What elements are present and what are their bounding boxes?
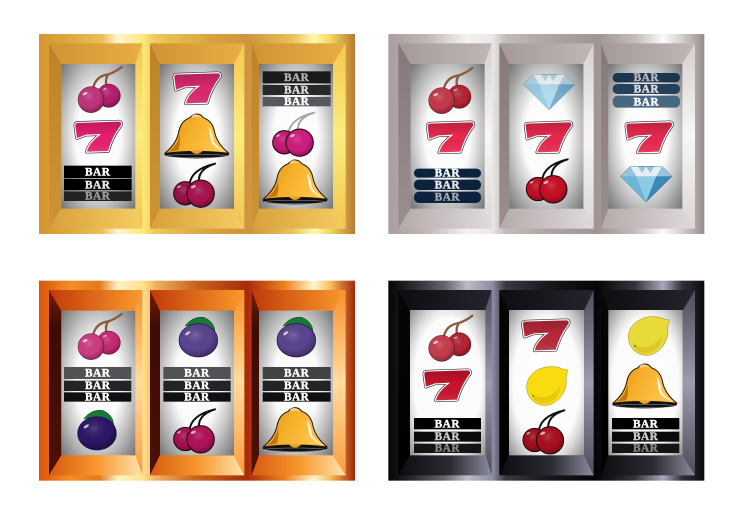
reel frame 1 xyxy=(49,290,142,475)
icon: bell xyxy=(164,114,229,158)
reel frame 3 xyxy=(252,43,346,229)
icon: lemon xyxy=(527,367,568,405)
icon: cherries xyxy=(273,113,314,156)
bar symbol xyxy=(64,166,132,203)
slot machine: black xyxy=(388,281,704,481)
machine body: gold xyxy=(39,34,355,234)
bar symbol: BAR xyxy=(284,391,310,403)
icon: seven xyxy=(424,370,470,400)
bar symbol xyxy=(263,367,331,403)
machine body: bronze xyxy=(39,281,355,481)
bar symbol: BAR xyxy=(435,419,460,431)
bar symbol: BAR xyxy=(85,167,111,179)
bar symbol: BAR xyxy=(633,431,659,443)
reel frame 1 xyxy=(398,290,492,475)
machine body: black xyxy=(388,281,704,481)
icon: cherries xyxy=(429,68,472,114)
icon: cherries xyxy=(526,159,568,203)
bar symbol: BAR xyxy=(184,380,210,392)
reel frame 3 xyxy=(601,43,695,229)
icon: cherries xyxy=(78,314,122,360)
reel frame 2 xyxy=(150,290,244,475)
icon: cherries xyxy=(174,409,215,453)
icon: plum xyxy=(179,317,218,357)
bar symbol xyxy=(263,71,331,108)
bar symbol: BAR xyxy=(633,443,659,455)
icon: lemon xyxy=(628,317,669,355)
bar symbol: BAR xyxy=(85,191,111,203)
machine body: silver xyxy=(388,34,704,234)
bar symbol: BAR xyxy=(634,96,659,108)
bar symbol: BAR xyxy=(435,192,460,204)
icon: cherries xyxy=(174,164,215,207)
icon: plum xyxy=(78,410,116,450)
icon: bell xyxy=(263,160,327,204)
icon: seven xyxy=(526,122,571,152)
bar symbol: BAR xyxy=(184,391,210,403)
icon: cherries xyxy=(429,316,472,361)
reel frame 2 xyxy=(499,290,594,475)
reel frame 1 xyxy=(398,43,492,229)
icon: cherries xyxy=(78,67,122,113)
reel frame 2 xyxy=(499,43,594,229)
bar symbol xyxy=(613,72,680,108)
icon: diamond xyxy=(523,74,575,110)
reel frame 2 xyxy=(150,43,244,229)
bar symbol: BAR xyxy=(284,368,310,380)
bar symbol: BAR xyxy=(435,443,460,455)
reel frame 3 xyxy=(252,290,346,475)
bar symbol: BAR xyxy=(284,380,310,392)
reel frame 1 xyxy=(49,43,142,229)
icon: cherries xyxy=(523,410,564,454)
slot machine: bronze xyxy=(39,281,355,481)
bar symbol: BAR xyxy=(85,391,111,403)
icon: seven xyxy=(428,122,473,152)
icon: bell xyxy=(263,407,327,452)
icon: seven xyxy=(174,73,220,103)
icon: bell xyxy=(612,364,677,408)
bar symbol: BAR xyxy=(284,72,310,84)
reel frame 3 xyxy=(601,290,695,475)
icon: seven xyxy=(626,122,672,152)
bar symbol: BAR xyxy=(85,368,111,380)
icon: plum xyxy=(277,317,316,357)
slot machine: gold xyxy=(39,34,355,234)
slot machine: silver xyxy=(388,34,704,234)
icon: seven xyxy=(75,122,121,152)
bar symbol: BAR xyxy=(85,380,111,392)
bar symbol: BAR xyxy=(184,368,210,380)
bar symbol: BAR xyxy=(435,431,460,443)
bar symbol xyxy=(163,367,231,403)
bar symbol: BAR xyxy=(634,72,659,84)
bar symbol: BAR xyxy=(634,83,659,95)
bar symbol: BAR xyxy=(435,168,460,180)
bar symbol xyxy=(414,168,481,204)
bar symbol: BAR xyxy=(284,85,310,97)
bar symbol: BAR xyxy=(284,96,310,108)
bar symbol: BAR xyxy=(85,179,111,191)
bar symbol xyxy=(64,367,131,403)
bar symbol xyxy=(414,418,481,455)
icon: seven xyxy=(523,320,569,350)
bar symbol: BAR xyxy=(435,179,460,191)
icon: diamond xyxy=(620,166,672,202)
bar symbol xyxy=(612,418,679,455)
bar symbol: BAR xyxy=(633,419,659,431)
